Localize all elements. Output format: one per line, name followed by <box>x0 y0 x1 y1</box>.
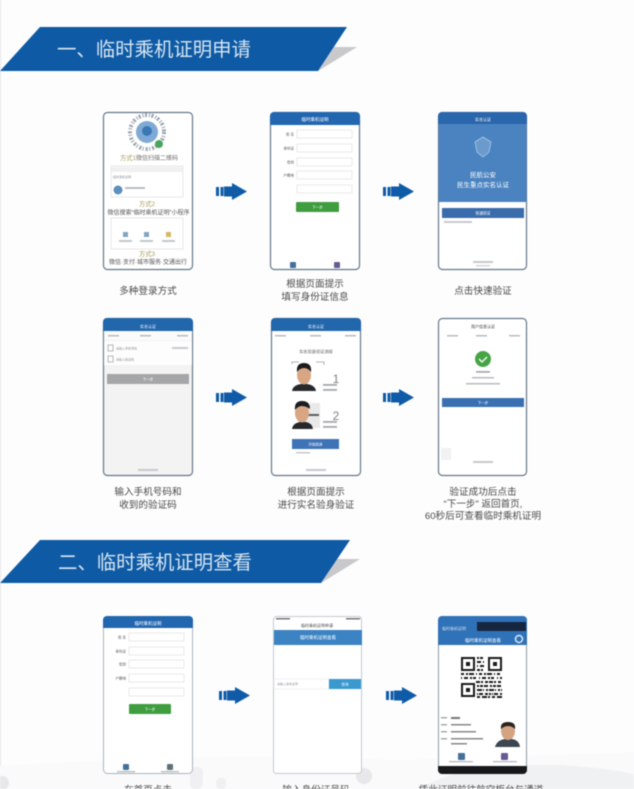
caption 2 <box>281 278 349 303</box>
phone 1: login methods: 临时乘机证明 <box>113 174 131 179</box>
phone 5: real name verification: 开始验身 <box>308 442 323 446</box>
phone 7: home page form: 下一步 <box>145 706 156 712</box>
caption 1: 多种登录方式 <box>119 285 177 297</box>
arrow 2 <box>383 183 414 200</box>
caption 4 <box>114 486 182 511</box>
caption 3: 点击快速验证 <box>454 285 512 297</box>
phone 7: home page form: 临时乘机证明 <box>134 620 162 627</box>
caption 6: “下一步” 返回首页, <box>444 498 522 510</box>
QR code <box>461 658 502 697</box>
phone 9: certificate result: 临时乘机证明 <box>442 625 466 631</box>
phone 4: phone number input <box>103 318 193 476</box>
phone 1: login methods <box>104 112 192 270</box>
phone 6: verification success: 用户信息认证 <box>471 323 495 329</box>
phone 1: login methods: 方式3 <box>139 249 156 258</box>
phone 8: id number lookup: 查询 <box>342 682 349 686</box>
background: faint bottom decoration <box>0 752 634 789</box>
phone 4: phone number input: 请输入验证码 <box>116 356 134 362</box>
phone 1: login methods: 微信·支付·城市服务·交通出行 <box>109 258 187 266</box>
phone 7: home page form <box>103 616 193 774</box>
phone 5: real name verification: 2 <box>333 409 340 423</box>
phone 1: login methods: 方式1 <box>120 153 137 162</box>
phone 9: certificate result: 临时乘机证明查看 <box>465 637 501 644</box>
phone 2: identity form: 姓 名 <box>286 132 294 136</box>
phone 8: id number lookup: 请输入身份证号 <box>277 681 298 686</box>
phone 8: id number lookup: 临时乘机证明申请 <box>301 622 333 628</box>
phone 6: verification success <box>438 318 526 476</box>
section banner 2 <box>0 540 360 583</box>
phone 1: login methods: 微信搜索“临时乘机证明”小程序 <box>108 208 190 216</box>
phone 6: verification success: 下一步 <box>478 400 489 405</box>
phone 7: home page form: 性别 <box>119 662 126 666</box>
phone 2: identity form: 性别 <box>287 160 294 164</box>
caption 5: 根据页面提示 <box>287 486 345 498</box>
photo: frontal portrait <box>292 362 324 391</box>
caption 4: 收到的验证码 <box>119 499 177 511</box>
phone 5: real name verification: 实名认证 <box>308 323 324 329</box>
phone 8: id number lookup: 临时乘机证明查看 <box>300 634 336 641</box>
icon: success check <box>475 351 491 367</box>
arrow 5 <box>219 687 250 704</box>
section title 2: 二、临时乘机证明查看 <box>58 552 252 574</box>
phone 5: real name verification: 1 <box>333 372 340 386</box>
arrow 1 <box>216 183 247 200</box>
caption 5: 进行实名验身验证 <box>278 499 355 511</box>
caption 6: 验证成功后点击 <box>449 486 517 498</box>
caption 5 <box>278 486 355 511</box>
phone 3: quick verification <box>438 112 527 270</box>
phone 1: login methods: 微信扫描二维码 <box>136 154 178 162</box>
phone 3: quick verification: 实名认证 <box>475 116 491 122</box>
phone 2: identity form: 临时乘机证明 <box>302 116 329 123</box>
phone 3: quick verification: 快速验证 <box>475 210 491 216</box>
icon: shield <box>475 137 491 157</box>
phone 2: identity form: 身份证 <box>284 146 294 150</box>
arrow 6 <box>386 687 417 704</box>
caption 2: 填写身份证信息 <box>281 291 349 303</box>
phone 2: identity form <box>270 112 360 270</box>
caption 4: 输入手机号码和 <box>114 486 182 498</box>
phone 4: phone number input: 下一步 <box>143 376 154 382</box>
phone 4: phone number input: 实名认证 <box>140 323 156 329</box>
photo: portrait with id card <box>292 401 320 429</box>
caption 6: 60秒后可查看临时乘机证明 <box>425 510 541 522</box>
caption 2: 根据页面提示 <box>286 278 344 290</box>
phone 7: home page form: 户籍地 <box>116 676 126 680</box>
phone 9: certificate result <box>438 616 527 774</box>
arrow 3 <box>216 389 247 406</box>
phone 7: home page form: 身份证 <box>116 648 126 654</box>
phone 4: phone number input: 请输入手机号码 <box>116 346 137 350</box>
phone 8: id number lookup <box>274 616 362 774</box>
phone 3: quick verification: 民航公安 <box>470 170 496 179</box>
icon: mini program code <box>130 115 164 149</box>
phone 2: identity form: 下一步 <box>312 204 323 210</box>
section banner 1 <box>0 27 357 71</box>
photo: certificate portrait <box>495 722 520 747</box>
arrow 4 <box>383 389 414 406</box>
phone 5: real name verification <box>271 318 361 476</box>
caption 6 <box>425 486 541 522</box>
section title 1: 一、临时乘机证明申请 <box>57 39 251 61</box>
phone 5: real name verification: 实名验身验证流程 <box>299 348 334 355</box>
phone 7: home page form: 姓 名 <box>118 634 126 640</box>
phone 3: quick verification: 民生重点实名认证 <box>457 180 510 189</box>
phone 1: login methods: 方式2 <box>139 199 156 208</box>
phone 2: identity form: 户籍地 <box>284 172 294 178</box>
